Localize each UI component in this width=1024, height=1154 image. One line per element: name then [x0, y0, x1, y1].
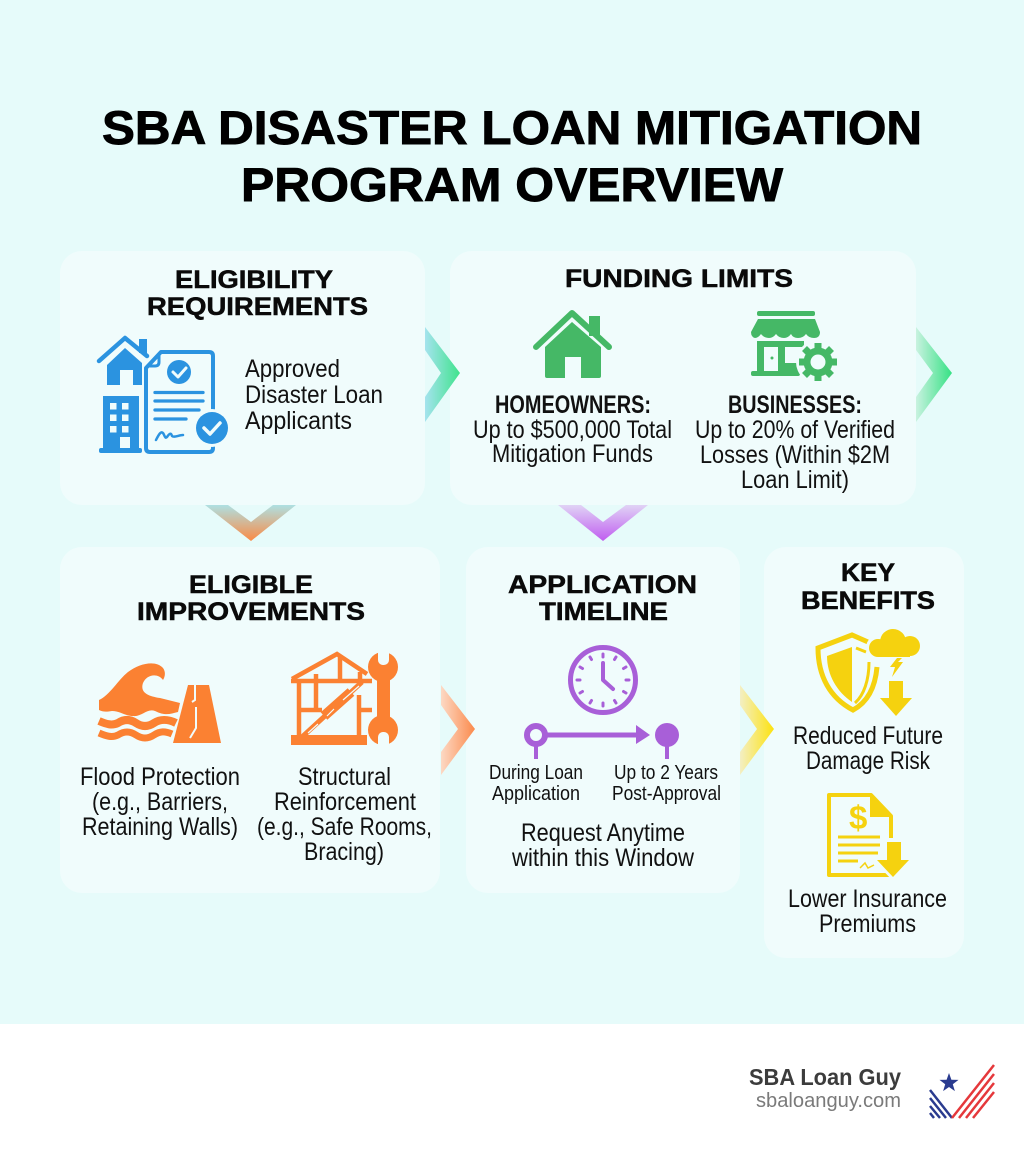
text: approved disaster loan applicants: Disaster Loan — [245, 381, 383, 409]
text: lower insurance premiums: Premiums — [819, 910, 916, 938]
icon: structural frame and wrench — [291, 648, 398, 749]
text: reduced future damage risk: Damage Risk — [806, 747, 930, 775]
footer band — [0, 1024, 1024, 1154]
arrow: down to eligible improvements — [205, 505, 296, 541]
panel: eligible improvements — [60, 547, 440, 893]
title: PROGRAM OVERVIEW — [241, 158, 784, 211]
text: structural reinforcement: (e.g., Safe Rooms, — [257, 813, 432, 841]
text: homeowners limit: Mitigation Funds — [492, 440, 653, 468]
text: up to 2 years post-approval: Post-Approval — [612, 783, 721, 805]
title — [102, 101, 922, 211]
heading: eligibility requirements: REQUIREMENTS — [147, 293, 368, 321]
text: during loan application: During Loan — [489, 762, 583, 784]
icon: green house — [536, 313, 609, 378]
text: reduced future damage risk — [793, 722, 943, 775]
title: SBA DISASTER LOAN MITIGATION — [102, 101, 922, 154]
text: homeowners limit: Up to $500,000 Total — [473, 416, 672, 444]
brand name and website: sbaloanguy.com — [756, 1090, 901, 1112]
text: businesses limit: BUSINESSES: — [728, 391, 862, 419]
text: up to 2 years post-approval: Up to 2 Years — [614, 762, 718, 784]
arrow: eligibility to funding — [425, 327, 460, 422]
chart: timeline arrow — [527, 723, 679, 759]
icon: insurance document with dollar and down arrow — [829, 795, 913, 881]
text: flood protection — [80, 763, 240, 841]
text: reduced future damage risk: Reduced Future — [793, 722, 943, 750]
panel: funding limits — [450, 251, 916, 505]
text: structural reinforcement: Reinforcement — [274, 788, 416, 816]
icon: green storefront with gear — [751, 311, 840, 384]
text: request anytime — [511, 819, 695, 872]
arrow: improvements to timeline — [441, 685, 475, 775]
text: businesses limit — [695, 391, 895, 494]
brand name and website: SBA Loan Guy — [749, 1064, 901, 1090]
text: businesses limit: Up to 20% of Verified — [695, 416, 895, 444]
text: homeowners limit — [473, 391, 672, 468]
heading: eligibility requirements: ELIGIBILITY — [175, 266, 333, 294]
text: up to 2 years post-approval — [612, 762, 721, 805]
arrow: down to application timeline — [558, 505, 648, 541]
text: approved disaster loan applicants: Approved — [245, 355, 340, 383]
icon: insurance document with dollar and down arrow: $ — [849, 799, 867, 836]
icon: house, building and approved document — [99, 338, 231, 453]
text: flood protection: (e.g., Barriers, — [92, 788, 228, 816]
icon: flag check logo — [930, 1065, 994, 1118]
heading: funding limits: FUNDING LIMITS — [565, 265, 793, 293]
text: flood protection: Flood Protection — [80, 763, 240, 791]
heading: application timeline — [508, 571, 697, 626]
heading: application timeline: APPLICATION — [508, 571, 697, 599]
panel: application timeline — [466, 547, 740, 893]
text: lower insurance premiums — [788, 885, 947, 938]
heading: application timeline: TIMELINE — [539, 598, 668, 626]
text: approved disaster loan applicants: Applicants — [245, 407, 352, 435]
text: flood protection: Retaining Walls) — [82, 813, 238, 841]
heading: eligible improvements: ELIGIBLE — [189, 571, 313, 599]
icon: shield, storm and down arrow — [818, 629, 920, 716]
heading: eligibility requirements — [147, 266, 368, 321]
heading: eligible improvements: IMPROVEMENTS — [137, 598, 365, 626]
text: lower insurance premiums: Lower Insurance — [788, 885, 947, 913]
panel: key benefits — [764, 547, 964, 958]
arrow: timeline to benefits — [740, 685, 774, 775]
heading: eligible improvements — [137, 571, 365, 626]
text: request anytime: Request Anytime — [521, 819, 685, 847]
text: during loan application — [489, 762, 583, 805]
heading: key benefits: BENEFITS — [801, 587, 935, 615]
text: businesses limit: Loan Limit) — [741, 466, 849, 494]
text: structural reinforcement — [257, 763, 432, 866]
text: structural reinforcement: Structural — [298, 763, 391, 791]
text: approved disaster loan applicants — [245, 355, 383, 435]
text: businesses limit: Losses (Within $2M — [700, 441, 890, 469]
text: during loan application: Application — [492, 783, 580, 805]
panel: eligibility requirements — [60, 251, 425, 505]
icon: flood wave and barrier — [99, 663, 221, 743]
text: request anytime: within this Window — [511, 844, 695, 872]
heading: key benefits: KEY — [841, 559, 895, 587]
text: homeowners limit: HOMEOWNERS: — [495, 391, 651, 419]
text: structural reinforcement: Bracing) — [304, 838, 384, 866]
arrow: funding to next — [916, 327, 952, 422]
brand name and website — [749, 1064, 901, 1112]
heading: key benefits — [801, 559, 935, 615]
icon: clock — [570, 648, 636, 712]
